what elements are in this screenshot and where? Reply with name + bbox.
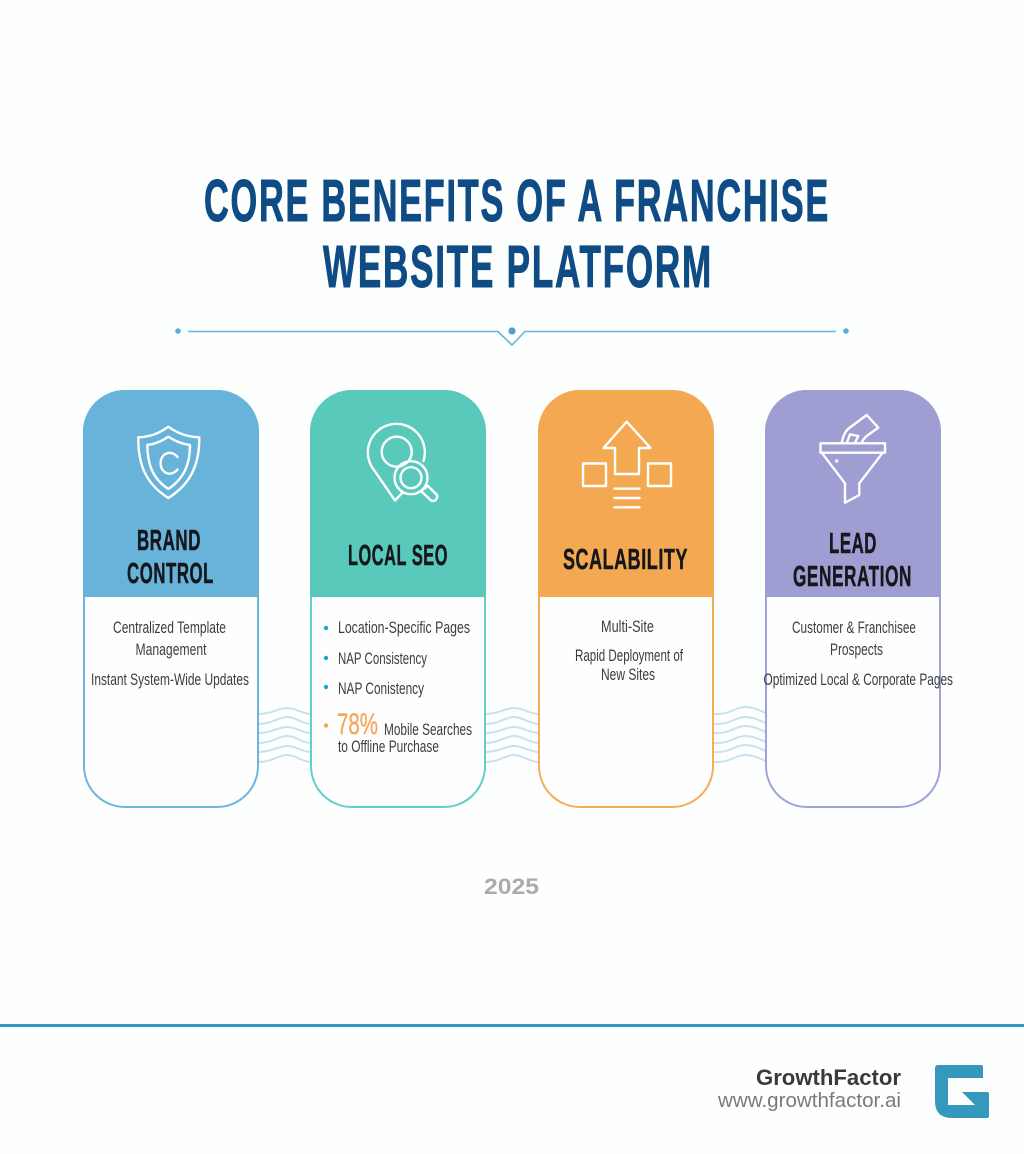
text block: scalability points: Rapid Deployment of [575,646,683,665]
text block: local seo points: 78% [337,708,378,741]
text block: lead generation points: Customer & Franchisee [792,618,916,637]
icon: map pin with magnifier [368,424,437,501]
heading: lead generation: LEAD [829,528,877,560]
wave connector: brand control to local seo [259,708,310,762]
text block: brand control points: Instant System-Wide Updates [91,670,249,689]
text block: local seo points: Location-Specific Pages [338,618,470,637]
icon: shield [138,427,199,498]
text block: scalability points [575,617,683,684]
text block: local seo points: Mobile Searches [384,720,472,739]
footer brand text: www.growthfactor.ai [717,1090,901,1112]
text block: local seo points: NAP Consistency [338,649,427,668]
footer brand text [717,1065,901,1112]
text block: scalability points: Multi-Site [601,617,654,636]
panel: lead generation [764,390,953,807]
year label: 2025 [484,874,539,899]
icon: growthfactor logo [935,1065,989,1118]
title divider [175,327,849,345]
heading: brand control [127,525,214,590]
wave connector: scalability to lead generation [714,707,765,762]
text block: local seo points: to Offline Purchase [338,737,439,756]
text block: brand control points: Management [136,640,207,659]
text block: brand control points: Centralized Template [113,618,226,637]
icon: upward arrow with squares [583,422,671,507]
heading: brand control: BRAND [137,525,201,557]
title: WEBSITE PLATFORM [323,234,713,300]
heading: brand control: CONTROL [127,558,214,590]
panel: scalability [538,390,714,807]
heading: local seo: LOCAL SEO [348,540,448,572]
text block: local seo points: NAP Conistency [338,679,424,698]
title [204,168,830,300]
panel: brand control [83,390,259,807]
panel: local seo [310,390,486,807]
text block: brand control points [91,618,249,689]
footer brand text: GrowthFactor [756,1065,901,1090]
heading: lead generation: GENERATION [793,561,912,593]
text block: lead generation points: Prospects [830,640,883,659]
footer rule [0,1024,1024,1027]
heading: lead generation [793,528,912,593]
text block: scalability points: New Sites [601,665,655,684]
icon: funnel with hand [820,415,885,503]
text block: local seo points [324,618,472,756]
heading: scalability: SCALABILITY [563,544,688,576]
wave connector: local seo to scalability [486,708,538,762]
text block: lead generation points [764,618,953,689]
